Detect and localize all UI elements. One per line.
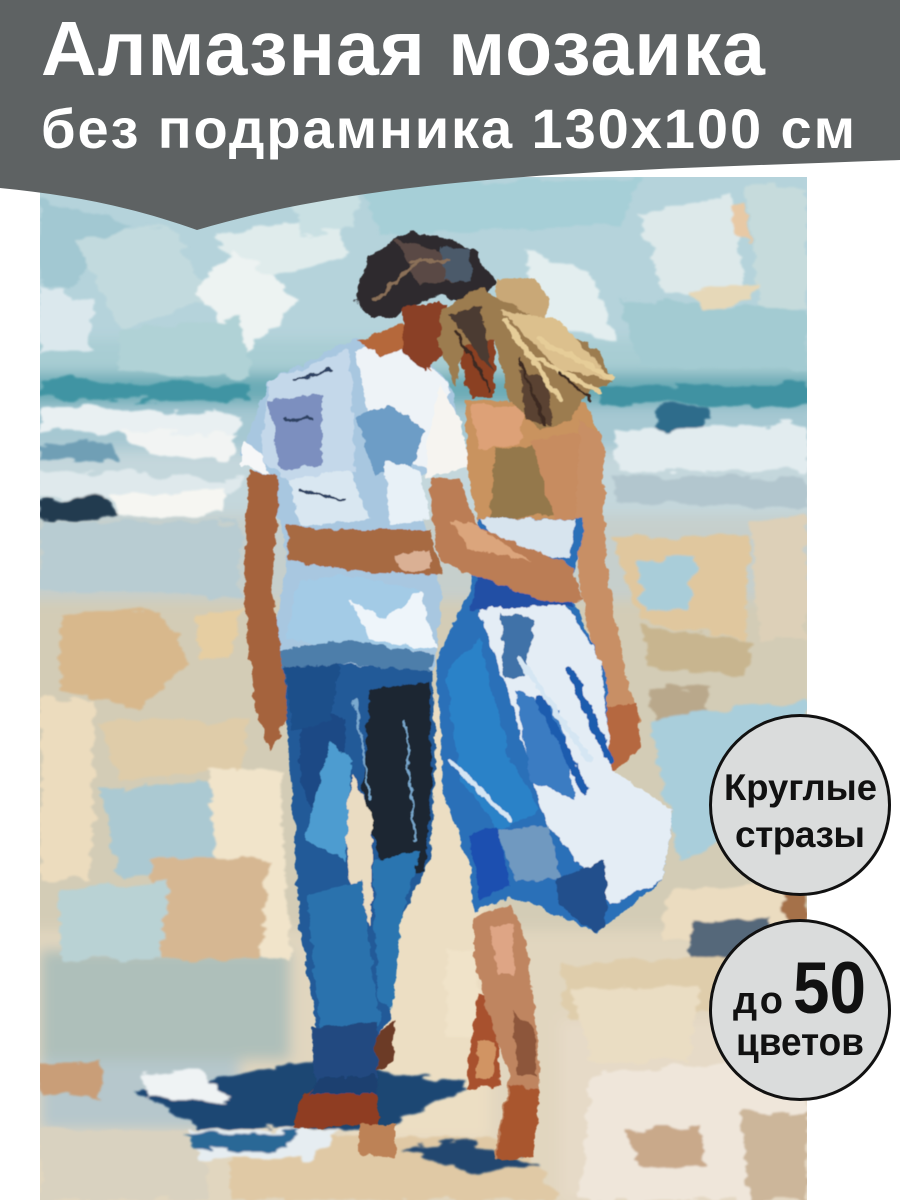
sand patches xyxy=(40,515,807,1200)
man arm at side xyxy=(244,470,287,750)
water splash shadow xyxy=(135,1060,540,1172)
hair strands and paint details xyxy=(285,260,612,840)
figures xyxy=(240,231,673,1160)
man head xyxy=(355,231,497,370)
man arm around woman xyxy=(430,477,582,603)
badge: up to 50 colors: до xyxy=(733,980,783,1022)
badge: up to 50 colors: цветов xyxy=(736,1021,864,1064)
woman legs xyxy=(467,903,540,1160)
man jeans xyxy=(282,660,435,1158)
header banner xyxy=(0,0,900,230)
background sky sea sand xyxy=(20,160,820,1200)
badge: up to 50 colors: 50 xyxy=(793,948,866,1029)
woman arm around man xyxy=(287,525,443,575)
sky brush strokes xyxy=(40,180,807,378)
painting: couple walking on the beach xyxy=(20,160,820,1200)
sea and foam xyxy=(40,378,807,522)
woman dress xyxy=(437,518,673,933)
badge: round rhinestones: стразы xyxy=(735,814,865,855)
title: Алмазная мозаика xyxy=(41,6,766,92)
badge: round rhinestones: Круглые xyxy=(724,767,877,808)
woman hair xyxy=(440,278,613,430)
woman back xyxy=(465,400,640,772)
badge: round rhinestones xyxy=(710,716,890,894)
badge: up to 50 colors xyxy=(710,920,890,1100)
man shirt xyxy=(240,340,470,672)
subtitle: без подрамника 130х100 см xyxy=(41,97,855,160)
